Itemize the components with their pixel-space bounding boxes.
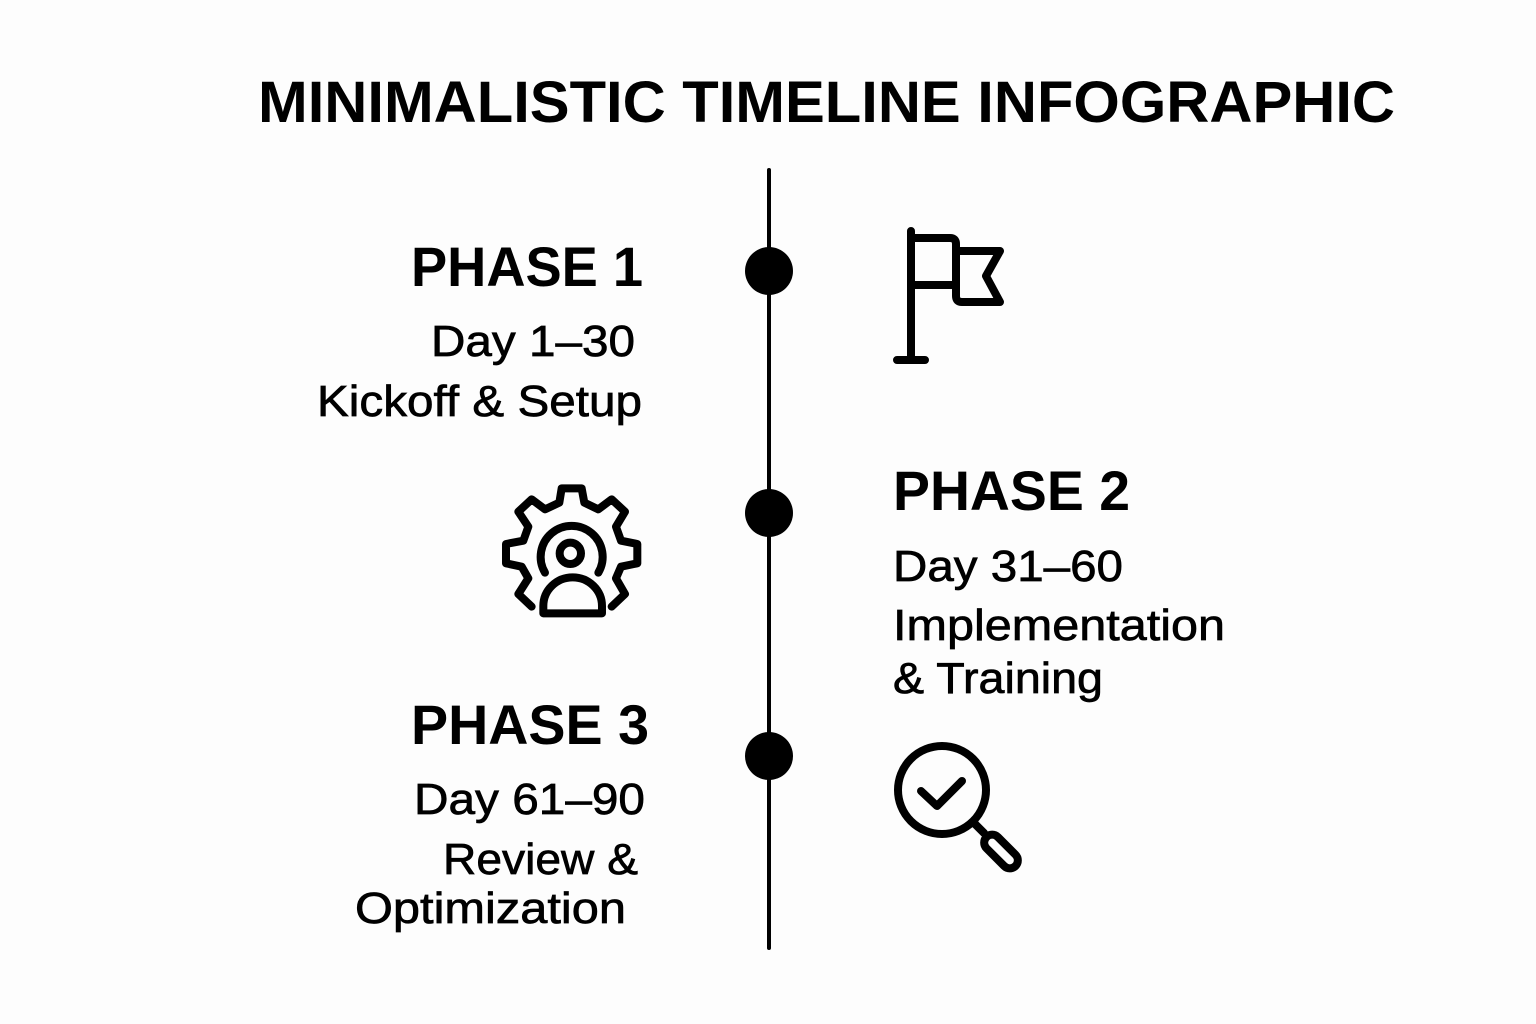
panel: phase 3 text	[355, 693, 649, 933]
heading: phase 1: PHASE 1	[411, 235, 643, 298]
text: phase 3 description: Optimization	[355, 884, 626, 933]
title: MINIMALISTIC TIMELINE INFOGRAPHIC	[258, 70, 1395, 135]
icon: flag	[897, 231, 1000, 360]
text: phase 3 description	[355, 835, 638, 933]
heading: phase 2: PHASE 2	[893, 459, 1130, 522]
panel: phase 2 text	[893, 459, 1225, 703]
heading: phase 3: PHASE 3	[411, 693, 649, 756]
timeline axis	[767, 170, 771, 948]
text: phase 3 dates: Day 61–90	[414, 775, 645, 824]
icon: gear with person	[506, 488, 637, 613]
text: phase 2 description: & Training	[893, 654, 1103, 703]
text: phase 1 dates: Day 1–30	[431, 317, 635, 366]
icon: magnifying glass with check	[898, 746, 1021, 872]
marker: phase 1	[745, 247, 793, 295]
marker: phase 2	[745, 489, 793, 537]
text: phase 2 description	[893, 601, 1225, 703]
panel: phase 1 text	[317, 235, 643, 426]
text: phase 2 dates: Day 31–60	[893, 542, 1123, 591]
text: phase 2 description: Implementation	[893, 601, 1225, 650]
text: phase 1 description: Kickoff & Setup	[317, 377, 642, 426]
text: phase 3 description: Review &	[443, 835, 638, 884]
marker: phase 3	[745, 732, 793, 780]
